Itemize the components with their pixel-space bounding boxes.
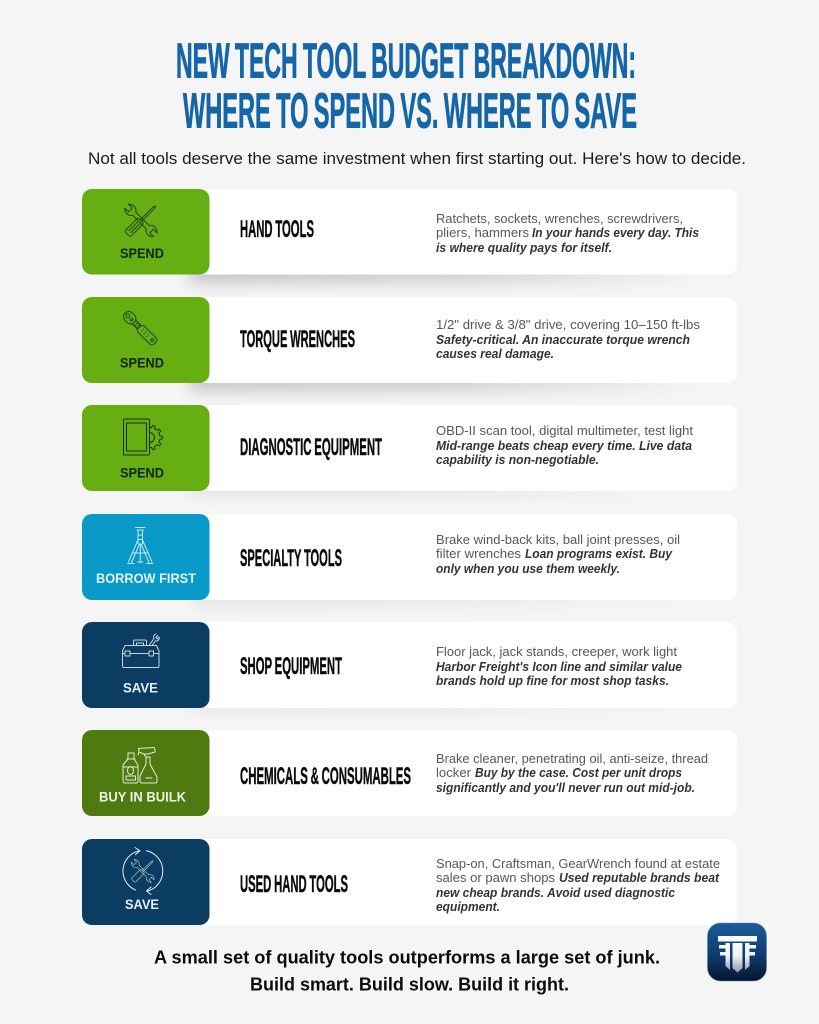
description <box>436 752 708 795</box>
icon: toolbox <box>122 634 159 668</box>
panel: hand tools <box>82 189 737 282</box>
description <box>436 857 720 914</box>
badge: spend <box>82 405 210 491</box>
description <box>436 424 694 467</box>
description: Floor jack, jack stands, creeper, work light <box>436 645 678 659</box>
description: Ratchets, sockets, wrenches, screwdrivers, <box>436 212 683 226</box>
description: Snap-on, Craftsman, GearWrench found at estate <box>436 857 720 871</box>
description: locker <box>436 766 471 780</box>
description: is where quality pays for itself. <box>436 241 612 255</box>
panel: torque wrenches: TORQUE WRENCHES <box>240 326 355 353</box>
icon: bottle and spray <box>123 748 157 783</box>
badge: save <box>82 622 210 708</box>
description <box>436 533 680 576</box>
description: Harbor Freight's Icon line and similar value <box>436 660 682 674</box>
description: Brake wind-back kits, ball joint presses, oil <box>436 533 680 547</box>
title <box>176 35 637 139</box>
description: brands hold up fine for most shop tasks. <box>436 674 669 688</box>
description: pliers, hammers <box>436 226 529 240</box>
subtitle: Not all tools deserve the same investment when first starting out. Here's how to decide. <box>88 149 746 168</box>
icon: recycled tools <box>123 848 163 894</box>
badge label: SPEND <box>120 464 164 480</box>
description: capability is non-negotiable. <box>436 453 599 467</box>
description: Brake cleaner, penetrating oil, anti-seize, thread <box>436 752 708 766</box>
description: significantly and you'll never run out mid-job. <box>436 781 695 795</box>
description: only when you use them weekly. <box>436 562 620 576</box>
description: Loan programs exist. Buy <box>525 547 673 561</box>
badge: borrow first <box>82 514 210 600</box>
badge: spend <box>82 297 210 383</box>
panel: shop equipment: SHOP EQUIPMENT <box>240 653 342 680</box>
description: Mid-range beats cheap every time. Live data <box>436 439 692 453</box>
panel: specialty tools <box>82 514 737 605</box>
panel: hand tools: HAND TOOLS <box>240 216 314 243</box>
closing statement <box>154 946 660 994</box>
badge label: SPEND <box>120 245 164 261</box>
panel: used hand tools: USED HAND TOOLS <box>240 871 348 898</box>
description: Used reputable brands beat <box>559 871 720 885</box>
description: new cheap brands. Avoid used diagnostic <box>436 886 675 900</box>
badge label: BORROW FIRST <box>96 570 196 586</box>
panel: diagnostic equipment: DIAGNOSTIC EQUIPMENT <box>240 434 382 461</box>
description: 1/2" drive & 3/8" drive, covering 10–150 ft-lbs <box>436 318 700 332</box>
description: causes real damage. <box>436 347 554 361</box>
logo <box>708 923 766 981</box>
icon: tablet and gear <box>124 419 162 455</box>
icon: crossed wrench and screwdriver <box>123 202 159 239</box>
badge label: SPEND <box>120 354 164 370</box>
badge: spend <box>82 189 210 274</box>
badge: buy in bulk <box>82 730 210 816</box>
badge label: SAVE <box>125 896 159 912</box>
badge label: BUY IN BUILK <box>99 789 186 805</box>
panel: specialty tools: SPECIALTY TOOLS <box>240 545 342 572</box>
description: Buy by the case. Cost per unit drops <box>475 766 682 780</box>
panel: chemicals and consumables: CHEMICALS & CONSUMABLES <box>240 763 411 790</box>
description <box>436 645 682 688</box>
panel: shop equipment <box>82 622 737 713</box>
badge: save <box>82 839 210 925</box>
description <box>436 212 699 255</box>
panel: diagnostic equipment <box>82 405 737 496</box>
description: Safety-critical. An inaccurate torque wrench <box>436 333 690 347</box>
panel: chemicals and consumables <box>82 730 737 816</box>
panel: torque wrenches <box>82 297 737 390</box>
badge label: SAVE <box>123 680 158 696</box>
description: In your hands every day. This <box>532 226 699 240</box>
description: sales or pawn shops <box>436 871 555 885</box>
closing statement: Build smart. Build slow. Build it right. <box>250 974 569 994</box>
description: filter wrenches <box>436 547 521 561</box>
icon: ratchet <box>121 309 159 347</box>
icon: jack stand <box>128 528 153 564</box>
closing statement: A small set of quality tools outperforms a large set of junk. <box>154 946 660 968</box>
panel: used hand tools <box>82 839 737 925</box>
description: equipment. <box>436 900 500 914</box>
description: OBD-II scan tool, digital multimeter, test light <box>436 424 694 438</box>
description <box>436 318 700 361</box>
